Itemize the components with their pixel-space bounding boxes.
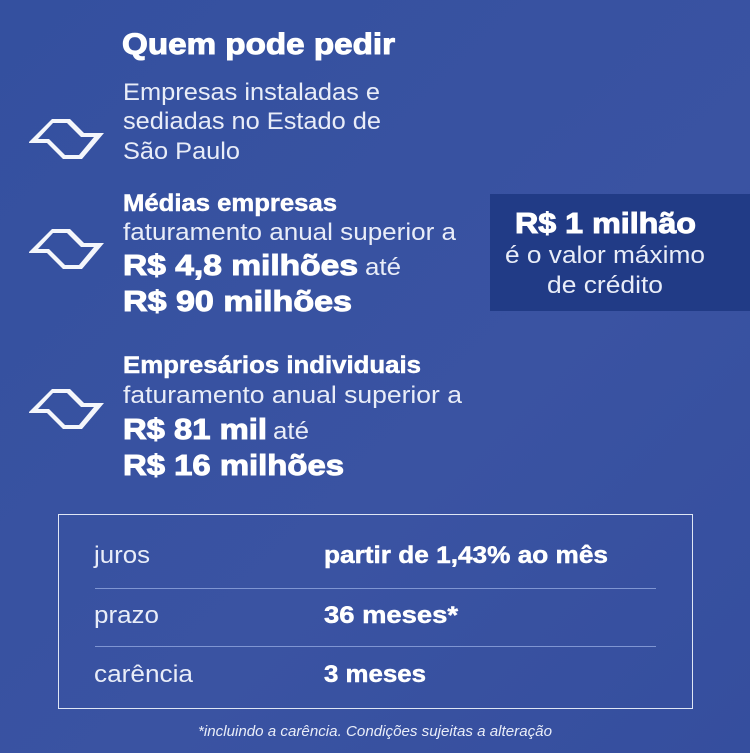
icon: São Paulo metro symbol 2: [29, 229, 104, 269]
callout: maximum credit: é o valor máximo: [505, 242, 705, 269]
panel: loan conditions table: [58, 514, 692, 708]
icon: São Paulo metro symbol 1: [29, 119, 104, 159]
row: prazo: prazo: [94, 602, 159, 629]
callout: maximum credit: [490, 194, 750, 311]
text block: médias empresas: R$ 90 milhões: [123, 286, 352, 318]
text block: eligibility: [123, 79, 381, 165]
callout: maximum credit: de crédito: [547, 272, 663, 299]
row: carência: carência: [94, 661, 194, 688]
text block: médias empresas: até: [365, 254, 401, 281]
text block: empresários individuais: [123, 352, 462, 482]
footnote: *incluindo a carência. Condições sujeitas a alteração: [198, 724, 552, 740]
callout: maximum credit: R$ 1 milhão: [515, 208, 696, 240]
text block: empresários individuais: R$ 16 milhões: [123, 450, 344, 482]
row: juros: [93, 542, 608, 569]
text block: médias empresas: Médias empresas: [123, 190, 337, 217]
row: juros: juros: [93, 542, 150, 569]
row: carência: [94, 661, 426, 688]
row: juros: partir de 1,43% ao mês: [324, 542, 608, 569]
text block: eligibility: sediadas no Estado de: [123, 108, 381, 135]
text block: eligibility: São Paulo: [123, 138, 240, 165]
text block: médias empresas: [123, 190, 456, 318]
text block: empresários individuais: R$ 81 mil: [123, 414, 267, 446]
title: Quem pode pedir: [122, 28, 395, 61]
row: prazo: [94, 602, 459, 629]
icon: São Paulo metro symbol 3: [29, 389, 104, 429]
text block: empresários individuais: até: [273, 418, 309, 445]
text block: empresários individuais: Empresários individuais: [123, 352, 421, 379]
text block: médias empresas: R$ 4,8 milhões: [123, 250, 358, 282]
row: prazo: 36 meses*: [324, 602, 459, 629]
text block: médias empresas: faturamento anual superior a: [123, 219, 456, 246]
text block: eligibility: Empresas instaladas e: [123, 79, 380, 106]
row: carência: 3 meses: [324, 661, 426, 688]
text block: empresários individuais: faturamento anual superior a: [123, 382, 462, 409]
